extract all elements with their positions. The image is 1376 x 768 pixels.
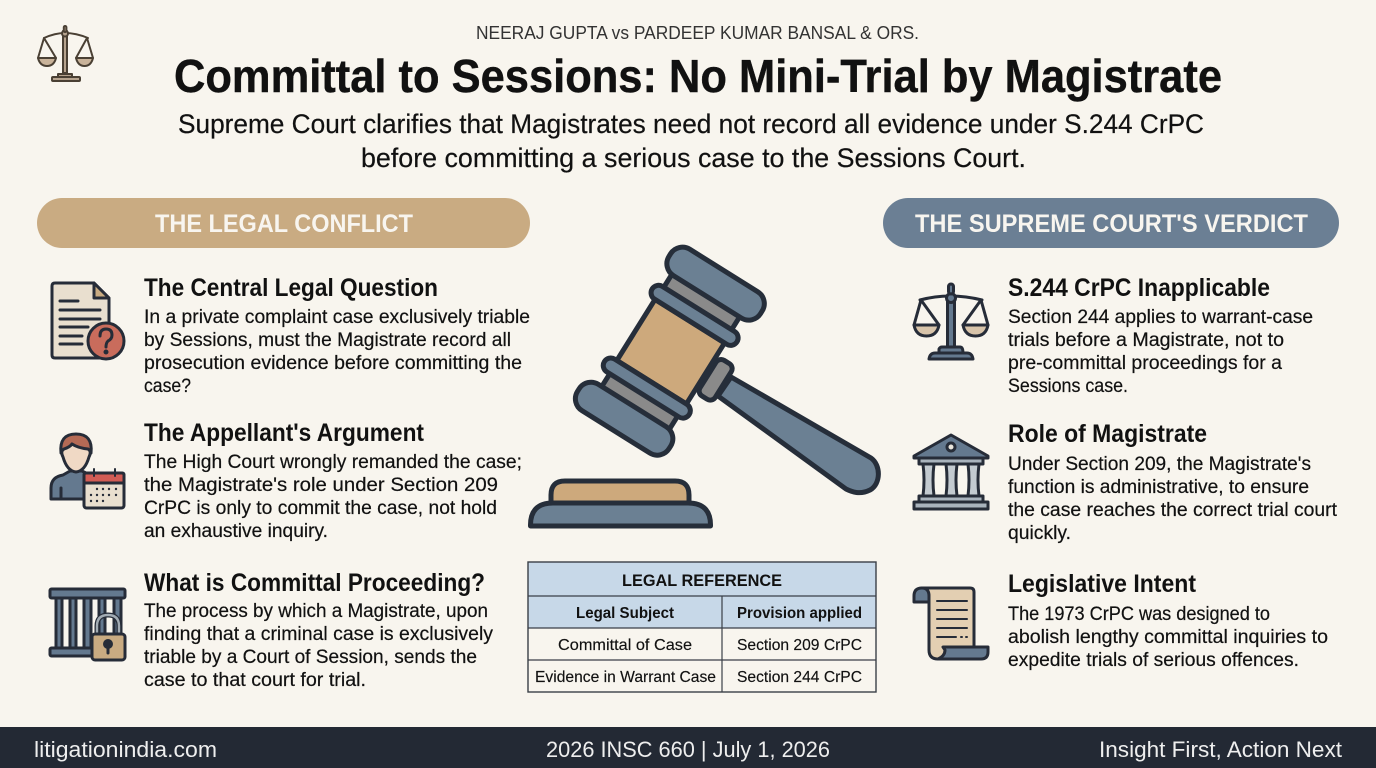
block: s.244 crpc inapplicable: trials before a Magistrate, not to bbox=[1008, 330, 1284, 351]
block: the appellant's argument: The High Court wrongly remanded the case; bbox=[144, 452, 522, 473]
block: the appellant's argument: the Magistrate's role under Section 209 bbox=[144, 475, 498, 496]
icon: header scales of justice bbox=[38, 26, 93, 81]
panel: the legal conflict bbox=[50, 274, 530, 691]
icon: document with question mark bbox=[52, 283, 124, 359]
panel: the supreme court's verdict bbox=[914, 274, 1338, 671]
block: what is committal proceeding bbox=[144, 569, 494, 691]
table: legal reference: Evidence in Warrant Case bbox=[535, 669, 716, 686]
gavel handle bbox=[718, 377, 878, 493]
block: s.244 crpc inapplicable: Section 244 applies to warrant-case bbox=[1008, 307, 1313, 328]
icon: scales of justice bbox=[914, 284, 988, 359]
block: the appellant's argument bbox=[144, 419, 522, 542]
block: what is committal proceeding: What is Committal Proceeding? bbox=[144, 569, 485, 597]
block: the central legal question: by Sessions, must the Magistrate record all bbox=[144, 330, 511, 351]
block: role of magistrate: the case reaches the correct trial court bbox=[1008, 500, 1338, 521]
block: role of magistrate: function is administrative, to ensure bbox=[1008, 477, 1309, 498]
table: legal reference: Provision applied bbox=[737, 605, 862, 622]
table: legal reference: Committal of Case bbox=[558, 637, 692, 654]
block: s.244 crpc inapplicable bbox=[1008, 274, 1313, 397]
block: what is committal proceeding: The process by which a Magistrate, upon bbox=[144, 601, 488, 622]
panel heading: the legal conflict: THE LEGAL CONFLICT bbox=[155, 210, 413, 238]
table: legal reference bbox=[528, 562, 876, 692]
block: role of magistrate: Under Section 209, the Magistrate's bbox=[1008, 454, 1311, 475]
footer bar: 2026 INSC 660 | July 1, 2026 bbox=[546, 737, 830, 762]
block: role of magistrate: quickly. bbox=[1008, 523, 1071, 544]
table: legal reference: Legal Subject bbox=[576, 605, 675, 622]
footer bar bbox=[0, 727, 1376, 768]
subtitle: before committing a serious case to the Sessions Court. bbox=[361, 143, 1026, 173]
block: what is committal proceeding: case to that court for trial. bbox=[144, 670, 366, 691]
block: legislative intent: The 1973 CrPC was designed to bbox=[1008, 604, 1270, 625]
icon: courthouse bbox=[914, 435, 988, 509]
block: legislative intent: abolish lengthy committal inquiries to bbox=[1008, 627, 1328, 648]
subtitle bbox=[178, 109, 1204, 173]
sound block bbox=[551, 481, 689, 503]
block: the appellant's argument: CrPC is only to commit the case, not hold bbox=[144, 498, 497, 519]
footer bar: Insight First, Action Next bbox=[1099, 737, 1342, 762]
case name line: NEERAJ GUPTA vs PARDEEP KUMAR BANSAL & ORS. bbox=[476, 23, 919, 43]
title: Committal to Sessions: No Mini-Trial by Magistrate bbox=[174, 50, 1222, 102]
icon: scroll bbox=[914, 588, 988, 659]
gavel head bbox=[570, 239, 775, 467]
illustration: gavel and sound block bbox=[530, 239, 878, 526]
block: the central legal question: prosecution evidence before committing the bbox=[144, 353, 522, 374]
table: legal reference: Section 244 CrPC bbox=[737, 669, 862, 686]
footer bar: litigationindia.com bbox=[34, 737, 217, 762]
block: the central legal question: The Central Legal Question bbox=[144, 274, 438, 302]
panel heading: the supreme court's verdict bbox=[883, 198, 1339, 248]
block: legislative intent: Legislative Intent bbox=[1008, 570, 1197, 598]
block: the central legal question bbox=[144, 274, 530, 397]
block: the central legal question: case? bbox=[144, 376, 191, 397]
block: the appellant's argument: The Appellant's Argument bbox=[144, 419, 425, 447]
block: s.244 crpc inapplicable: pre-committal proceedings for a bbox=[1008, 353, 1282, 374]
subtitle: Supreme Court clarifies that Magistrates need not record all evidence under S.244 CrPC bbox=[178, 109, 1204, 139]
icon: person with calendar bbox=[51, 434, 124, 508]
block: legislative intent bbox=[1008, 570, 1328, 671]
block: role of magistrate: Role of Magistrate bbox=[1008, 420, 1207, 448]
block: role of magistrate bbox=[1008, 420, 1338, 544]
icon: jail bars with padlock bbox=[50, 589, 125, 660]
block: the appellant's argument: an exhaustive inquiry. bbox=[144, 521, 328, 542]
block: s.244 crpc inapplicable: S.244 CrPC Inapplicable bbox=[1008, 274, 1270, 302]
block: legislative intent: expedite trials of serious offences. bbox=[1008, 650, 1299, 671]
panel heading: the supreme court's verdict: THE SUPREME COURT'S VERDICT bbox=[915, 210, 1308, 238]
block: the central legal question: In a private complaint case exclusively triable bbox=[144, 307, 530, 328]
block: what is committal proceeding: triable by a Court of Session, sends the bbox=[144, 647, 477, 668]
table: legal reference: Section 209 CrPC bbox=[737, 637, 862, 654]
table: legal reference: LEGAL REFERENCE bbox=[622, 571, 782, 590]
panel heading: the legal conflict bbox=[37, 198, 530, 248]
block: s.244 crpc inapplicable: Sessions case. bbox=[1008, 376, 1128, 397]
block: what is committal proceeding: finding that a criminal case is exclusively bbox=[144, 624, 494, 645]
